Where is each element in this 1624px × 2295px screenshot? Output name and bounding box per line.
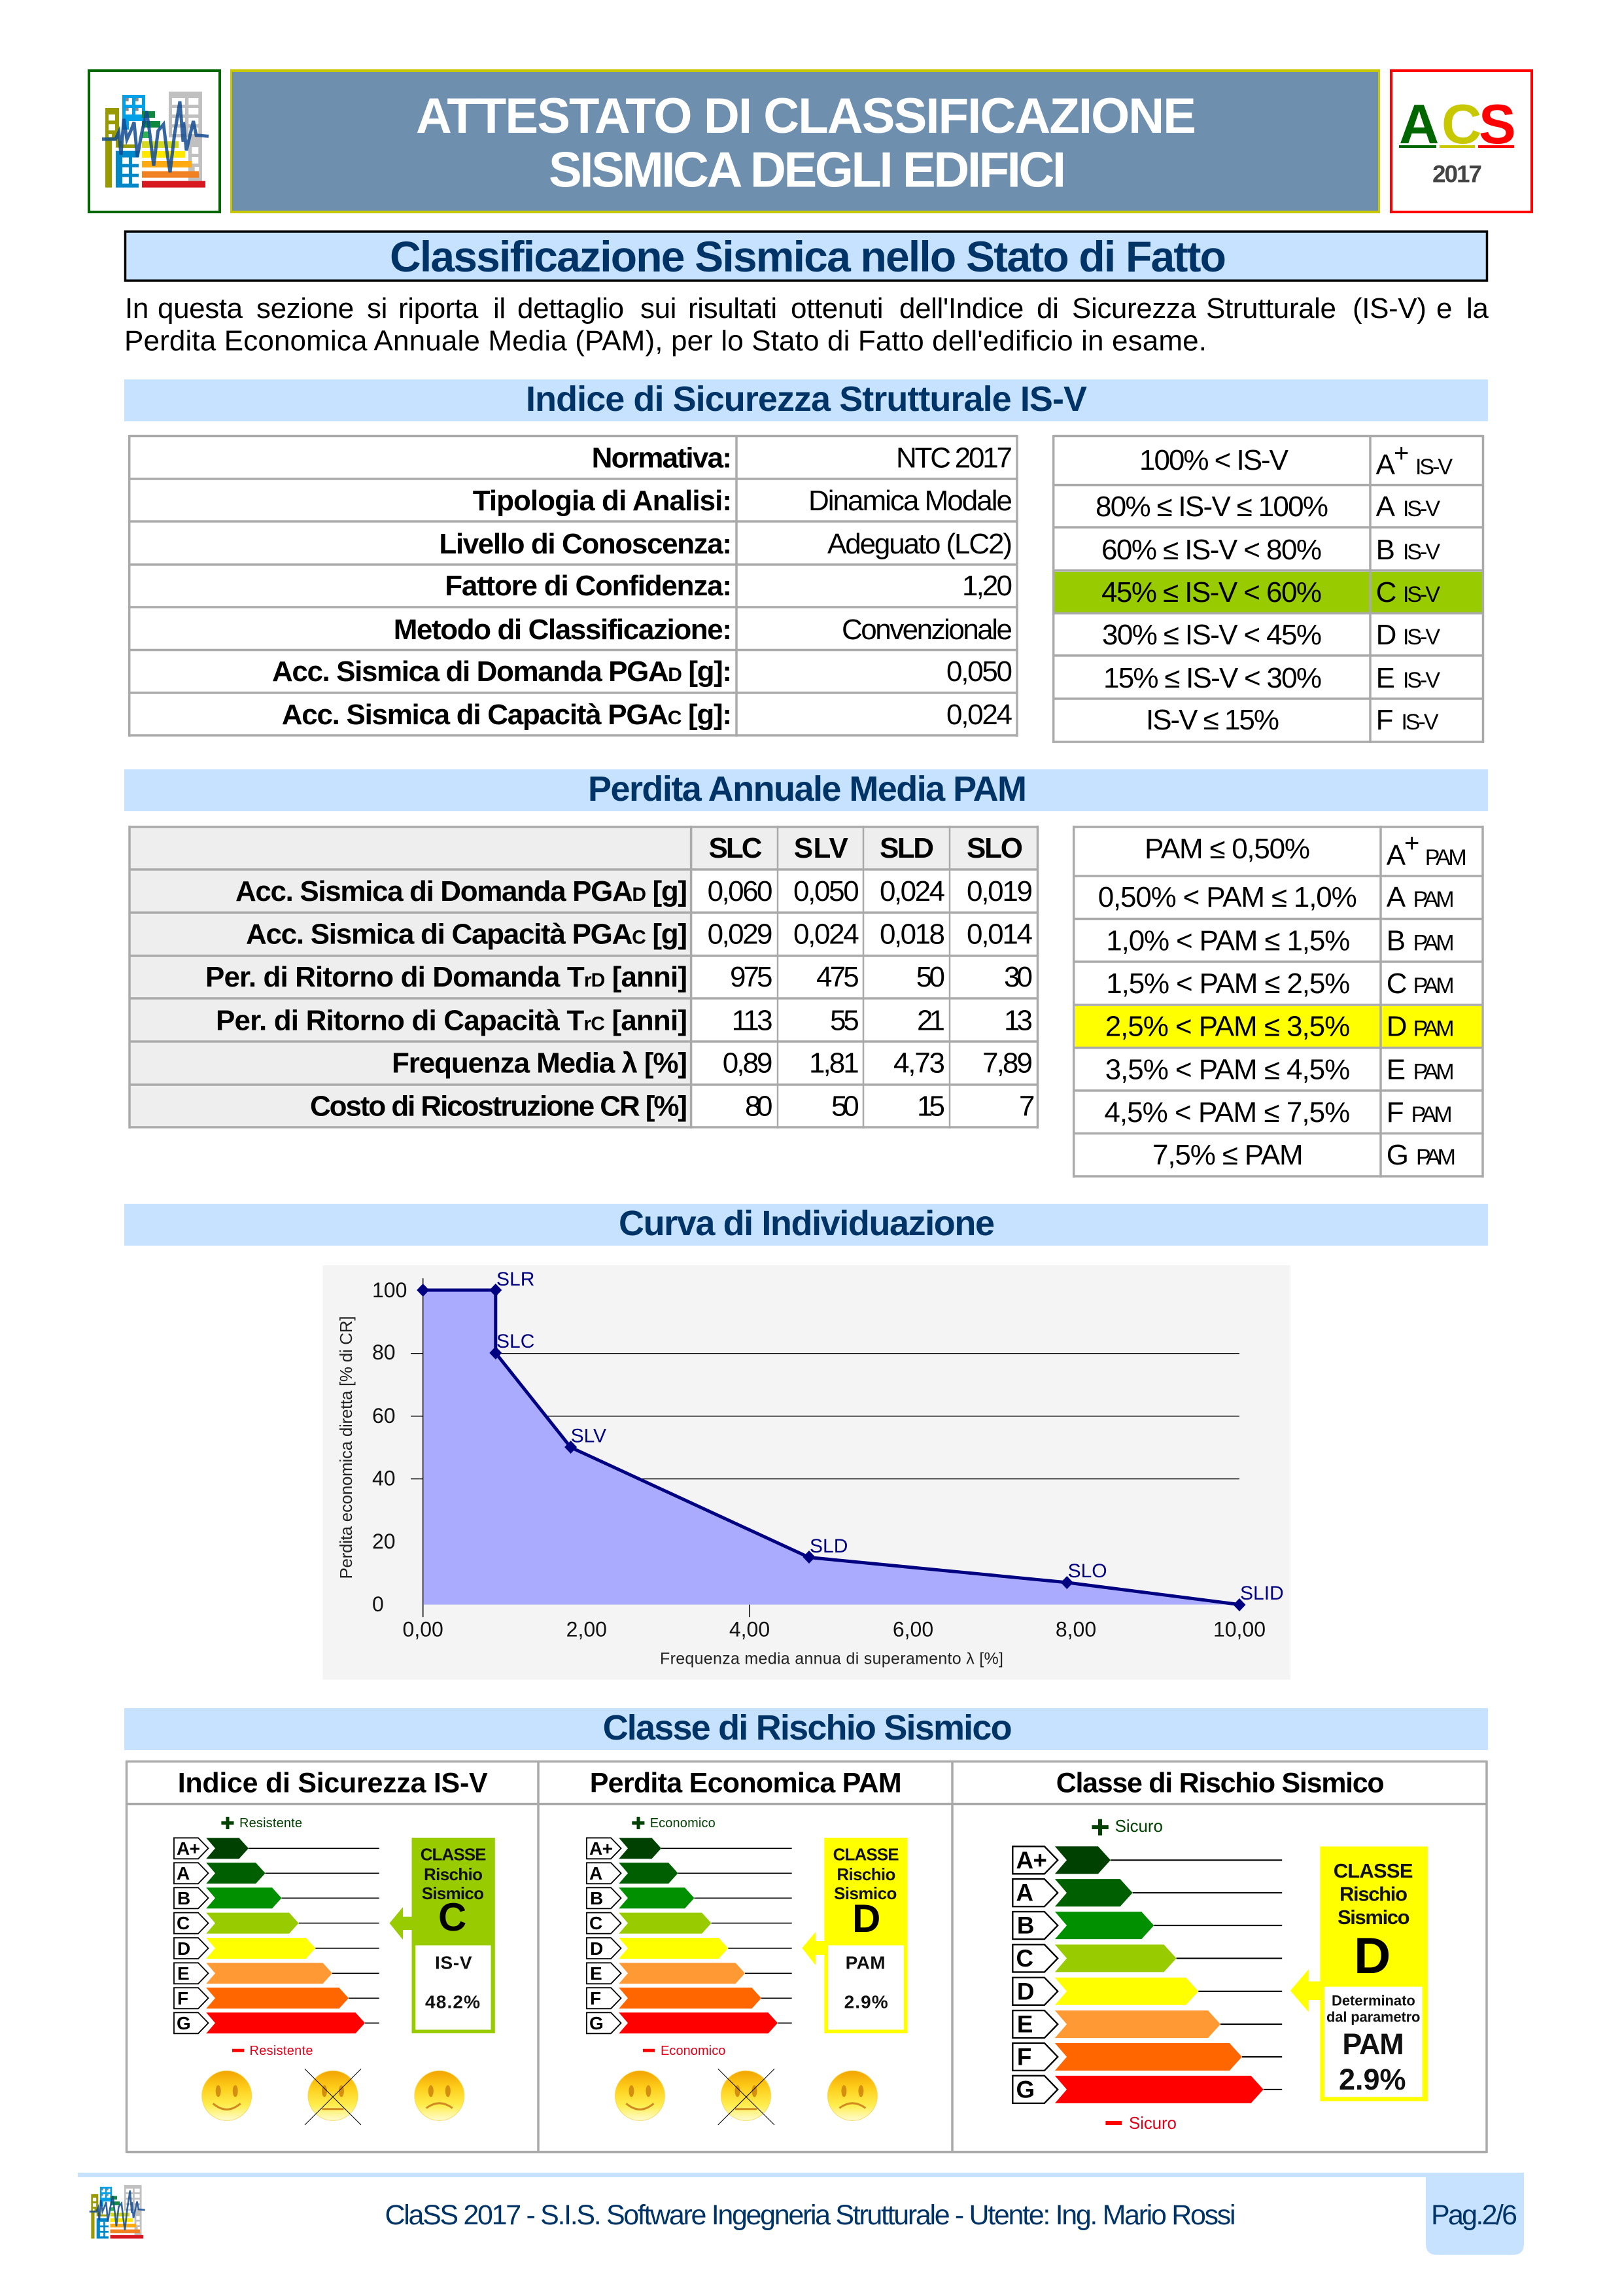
- ACS logo box: 2017: [1432, 160, 1482, 187]
- chart: curva di individuazione: 20: [372, 1530, 396, 1553]
- callout: class C IS-V: Rischio: [424, 1865, 483, 1884]
- panel: PAM energy scale: D: [590, 1938, 603, 1959]
- table: PAM classes: PAM: [1413, 1060, 1455, 1085]
- intro paragraph: la: [1466, 292, 1489, 324]
- title banner: [230, 69, 1380, 213]
- table: PAM classes: G: [1387, 1139, 1409, 1171]
- table: PAM parameters by limit state: Acc. Sismica di Capacità PGAC [g]: [246, 919, 687, 950]
- table: PAM parameters by limit state: Per. di Ritorno di Capacità TrC [anni]: [216, 1005, 687, 1036]
- table: analysis parameters: 0,024: [946, 699, 1012, 731]
- footer strip: Pag.2/6: [1431, 2199, 1517, 2231]
- title banner: SISMICA DEGLI EDIFICI: [549, 143, 1066, 198]
- intro paragraph: risultati: [688, 292, 777, 324]
- callout: class C IS-V: 48.2%: [425, 1991, 480, 2012]
- banner: Classe di Rischio Sismico: [124, 1708, 1488, 1750]
- panel: IS-V energy scale: E: [177, 1963, 190, 1984]
- table: analysis parameters: 1,20: [962, 570, 1012, 602]
- callout: overall class D: [1290, 1846, 1428, 2101]
- section heading: [126, 232, 1487, 281]
- table frame: risk class: Indice di Sicurezza IS-V: [178, 1768, 488, 1799]
- table: PAM parameters by limit state: 0,014: [967, 919, 1033, 950]
- callout: overall class D: CLASSE: [1334, 1859, 1413, 1882]
- intro paragraph: Perdita Economica Annuale Media (PAM), per lo Stato di Fatto dell'edificio in esame.: [124, 324, 1207, 357]
- table: PAM classes: PAM: [1413, 931, 1455, 956]
- intro paragraph: dell'Indice: [899, 292, 1024, 324]
- table: PAM parameters by limit state: 0,024: [793, 919, 859, 950]
- callout: class D PAM: D: [852, 1897, 880, 1940]
- ACS logo box: A: [1399, 94, 1439, 156]
- table: analysis parameters: 0,050: [946, 656, 1012, 688]
- table: PAM classes: [1074, 826, 1483, 1178]
- chart: curva di individuazione: Frequenza media annua di superamento λ [%]: [660, 1650, 1003, 1668]
- chart: curva di individuazione: 80: [372, 1340, 396, 1364]
- table: PAM classes: 1,0% < PAM ≤ 1,5%: [1106, 925, 1350, 957]
- panel: overall risk energy scale: D: [1017, 1978, 1034, 2005]
- panel: PAM energy scale: Economico: [650, 1816, 716, 1831]
- table: PAM classes: PAM: [1416, 1145, 1456, 1170]
- table: PAM classes: E: [1387, 1054, 1406, 1086]
- callout: class D PAM: Sismico: [834, 1883, 897, 1903]
- chart: curva di individuazione: 4,00: [729, 1618, 770, 1641]
- panel: PAM energy scale: G: [589, 2013, 604, 2033]
- panel: IS-V energy scale: Resistente: [239, 1816, 302, 1831]
- table: IS-V classes: 80% ≤ IS-V ≤ 100%: [1096, 491, 1328, 523]
- table: PAM classes: 1,5% < PAM ≤ 2,5%: [1106, 968, 1350, 1000]
- intro paragraph: di: [1037, 292, 1058, 324]
- callout: overall class D: Rischio: [1339, 1882, 1408, 1905]
- panel: PAM energy scale: [587, 1816, 792, 2058]
- banner: Perdita Annuale Media PAM: Perdita Annuale Media PAM: [588, 769, 1027, 809]
- table frame: risk class: Classe di Rischio Sismico: [1056, 1768, 1385, 1799]
- panel: overall risk energy scale: Sicuro: [1129, 2113, 1177, 2133]
- chart: curva di individuazione: 8,00: [1056, 1618, 1096, 1641]
- footer strip: [78, 2173, 1524, 2255]
- chart: curva di individuazione: 0: [372, 1592, 384, 1616]
- table: IS-V classes: IS-V: [1403, 497, 1440, 521]
- title banner: ATTESTATO DI CLASSIFICAZIONE: [416, 88, 1196, 144]
- chart: curva di individuazione: SLO: [1068, 1560, 1107, 1582]
- table: PAM classes: A: [1387, 839, 1406, 871]
- table: PAM parameters by limit state: 0,024: [880, 875, 945, 907]
- table: IS-V classes: IS-V: [1401, 710, 1439, 735]
- chart: curva di individuazione: 2,00: [566, 1618, 607, 1641]
- chart: curva di individuazione: 6,00: [893, 1618, 933, 1641]
- table: analysis parameters: Acc. Sismica di Domanda PGAD [g]:: [272, 656, 732, 688]
- panel: overall risk energy scale: F: [1017, 2043, 1031, 2070]
- banner: Indice di Sicurezza Strutturale: [124, 379, 1488, 421]
- smileys: PAM: [615, 2069, 877, 2125]
- callout: class D PAM: Rischio: [837, 1865, 895, 1884]
- table: IS-V classes: C: [1376, 576, 1396, 608]
- table: PAM classes: 4,5% < PAM ≤ 7,5%: [1104, 1096, 1350, 1129]
- chart: curva di individuazione: SLD: [810, 1535, 848, 1557]
- table: PAM parameters by limit state: 1,81: [809, 1047, 859, 1079]
- smileys: IS-V: [202, 2069, 464, 2125]
- table: PAM classes: PAM: [1413, 887, 1455, 912]
- chart: curva di individuazione: [323, 1265, 1290, 1680]
- logo box: buildings icon: [89, 71, 220, 212]
- table: IS-V classes: E: [1376, 662, 1395, 694]
- table: analysis parameters: [130, 435, 1017, 737]
- table: PAM parameters by limit state: 0,060: [708, 875, 773, 907]
- table: PAM parameters by limit state: 0,018: [880, 919, 945, 950]
- table: IS-V classes: IS-V: [1403, 668, 1440, 693]
- intro paragraph: riporta: [398, 292, 479, 324]
- panel: overall risk energy scale: C: [1016, 1945, 1033, 1972]
- table: PAM classes: PAM: [1411, 1102, 1453, 1127]
- intro paragraph: ottenuti: [791, 292, 883, 324]
- chart: curva di individuazione: 10,00: [1213, 1618, 1266, 1641]
- panel: overall risk energy scale: A+: [1016, 1847, 1047, 1874]
- intro paragraph: sui: [640, 292, 676, 324]
- table: PAM parameters by limit state: 15: [917, 1090, 945, 1122]
- panel: PAM energy scale: B: [590, 1888, 603, 1908]
- intro paragraph: si: [367, 292, 387, 324]
- table: PAM parameters by limit state: Per. di Ritorno di Domanda TrD [anni]: [205, 961, 687, 993]
- ACS logo box: [1391, 71, 1532, 212]
- table: PAM parameters by limit state: Frequenza Media λ [%]: [392, 1047, 687, 1079]
- callout: class C IS-V: Sismico: [422, 1883, 484, 1903]
- intro paragraph: sezione: [256, 292, 354, 324]
- callout: class D PAM: CLASSE: [833, 1845, 899, 1865]
- table: PAM classes: PAM: [1425, 845, 1467, 870]
- panel: PAM energy scale: A+: [589, 1838, 613, 1859]
- table: analysis parameters: Fattore di Confidenza:: [445, 570, 732, 602]
- callout: class C IS-V: IS-V: [435, 1952, 472, 1972]
- table: PAM classes: B: [1387, 925, 1406, 957]
- chart: curva di individuazione: SLID: [1240, 1583, 1284, 1604]
- callout: overall class D: PAM: [1342, 2027, 1404, 2061]
- panel: IS-V energy scale: A: [177, 1863, 190, 1883]
- table: PAM parameters by limit state: [130, 826, 1037, 1129]
- area under curve: [423, 1290, 1239, 1605]
- callout: overall class D: 2.9%: [1339, 2063, 1406, 2096]
- table: PAM classes: 0,50% < PAM ≤ 1,0%: [1098, 881, 1357, 913]
- table: IS-V classes: 45% ≤ IS-V < 60%: [1101, 576, 1322, 608]
- table: PAM parameters by limit state: 475: [816, 961, 859, 993]
- panel: PAM energy scale: C: [589, 1913, 602, 1933]
- ACS logo box: S: [1479, 94, 1516, 156]
- intro paragraph: (IS-V): [1353, 292, 1426, 324]
- table: PAM classes: A: [1387, 881, 1406, 913]
- table: PAM classes: D: [1387, 1010, 1408, 1043]
- chart: curva di individuazione: Perdita economica diretta [% di CR]: [336, 1316, 356, 1579]
- intro paragraph: questa: [158, 292, 243, 324]
- table: IS-V classes: 60% ≤ IS-V < 80%: [1101, 534, 1322, 566]
- chart: curva di individuazione: 60: [372, 1404, 396, 1428]
- banner: Curva di Individuazione: [124, 1204, 1488, 1246]
- table: IS-V classes: IS-V: [1403, 540, 1440, 565]
- panel: PAM energy scale: F: [590, 1988, 601, 2008]
- chart: curva di individuazione: SLV: [571, 1425, 606, 1447]
- intro paragraph: In: [125, 292, 148, 324]
- callout: class C IS-V: C: [438, 1895, 466, 1939]
- table: analysis parameters: NTC 2017: [896, 442, 1012, 474]
- callout: overall class D: Determinato: [1332, 1992, 1415, 2008]
- table: PAM parameters by limit state: 13: [1004, 1005, 1033, 1036]
- table: PAM parameters by limit state: 7: [1019, 1090, 1035, 1122]
- table: analysis parameters: Livello di Conoscenza:: [439, 528, 732, 560]
- panel: PAM energy scale: E: [590, 1963, 602, 1984]
- table: PAM classes: +: [1404, 829, 1419, 858]
- panel: overall risk energy scale: A: [1016, 1880, 1033, 1906]
- table: PAM parameters by limit state: Costo di Ricostruzione CR [%]: [310, 1090, 687, 1122]
- panel: overall risk energy scale: Sicuro: [1115, 1816, 1163, 1836]
- table: IS-V classes: IS-V ≤ 15%: [1146, 704, 1279, 736]
- table: IS-V classes: D: [1376, 619, 1396, 651]
- panel: PAM energy scale: A: [589, 1863, 602, 1883]
- panel: IS-V energy scale: A+: [177, 1838, 200, 1859]
- chart: curva di individuazione: 0,00: [403, 1618, 443, 1641]
- table: PAM classes: C: [1387, 968, 1408, 1000]
- table: PAM parameters by limit state: 0,019: [967, 875, 1033, 907]
- panel: overall risk energy scale: E: [1017, 2011, 1033, 2038]
- table: PAM parameters by limit state: 30: [1004, 961, 1033, 993]
- table: PAM parameters by limit state: SLD: [880, 832, 934, 864]
- table: PAM parameters by limit state: SLC: [709, 832, 763, 864]
- table: PAM classes: PAM: [1413, 1017, 1455, 1042]
- table: analysis parameters: Tipologia di Analisi:: [473, 485, 732, 517]
- callout: overall class D: dal parametro: [1326, 2009, 1421, 2025]
- intro paragraph: Sicurezza: [1072, 292, 1197, 324]
- table: IS-V classes: A: [1376, 491, 1396, 523]
- table: PAM parameters by limit state: 21: [917, 1005, 945, 1036]
- table: IS-V classes: +: [1394, 439, 1409, 468]
- panel: IS-V energy scale: D: [177, 1938, 190, 1959]
- table: analysis parameters: Normativa:: [592, 442, 732, 474]
- table frame: risk class: [127, 1761, 1487, 2153]
- callout: class C IS-V: CLASSE: [421, 1845, 487, 1865]
- table: IS-V classes: IS-V: [1403, 625, 1440, 650]
- table: PAM parameters by limit state: 50: [916, 961, 945, 993]
- section heading: Classificazione Sismica nello Stato di Fatto: [390, 232, 1226, 281]
- table: PAM parameters by limit state: 113: [732, 1005, 773, 1036]
- table: IS-V classes: 100% < IS-V: [1139, 444, 1289, 476]
- table: analysis parameters: Acc. Sismica di Capacità PGAC [g]:: [282, 699, 732, 731]
- table: PAM parameters by limit state: 55: [830, 1005, 859, 1036]
- footer strip: ClaSS 2017 - S.I.S. Software Ingegneria Strutturale - Utente: Ing. Mario Rossi: [385, 2199, 1236, 2231]
- table: analysis parameters: Metodo di Classificazione:: [394, 614, 732, 646]
- table: IS-V classes: A: [1376, 449, 1396, 481]
- table frame: risk class: Perdita Economica PAM: [590, 1768, 902, 1799]
- chart: curva di individuazione: 40: [372, 1466, 396, 1490]
- panel: IS-V energy scale: G: [177, 2013, 191, 2033]
- intro paragraph: il: [493, 292, 506, 324]
- intro paragraph: Strutturale: [1206, 292, 1336, 324]
- callout: overall class D: Sismico: [1338, 1906, 1410, 1929]
- table: PAM parameters by limit state: 975: [730, 961, 773, 993]
- table: analysis parameters: Adeguato (LC2): [827, 528, 1012, 560]
- banner: Indice di Sicurezza Strutturale: Indice di Sicurezza Strutturale IS-V: [526, 379, 1087, 419]
- chart: curva di individuazione: SLC: [496, 1331, 534, 1352]
- ACS logo box: C: [1442, 94, 1481, 156]
- callout: class C IS-V: [390, 1838, 495, 2033]
- banner: Curva di Individuazione: Curva di Individuazione: [619, 1204, 995, 1243]
- callout: overall class D: D: [1354, 1927, 1391, 1984]
- chart: curva di individuazione: SLR: [496, 1269, 534, 1290]
- banner: Perdita Annuale Media PAM: [124, 769, 1488, 811]
- table: IS-V classes: IS-V: [1403, 582, 1440, 607]
- banner: Classe di Rischio Sismico: Classe di Rischio Sismico: [603, 1708, 1012, 1747]
- chart: curva di individuazione: 100: [372, 1278, 407, 1302]
- table: PAM parameters by limit state: 0,050: [793, 875, 859, 907]
- table: PAM classes: 2,5% < PAM ≤ 3,5%: [1105, 1010, 1350, 1043]
- callout: class D PAM: 2.9%: [844, 1991, 888, 2012]
- table: PAM parameters by limit state: 7,89: [982, 1047, 1033, 1079]
- table: IS-V classes: [1054, 435, 1483, 743]
- intro paragraph: dettaglio: [517, 292, 624, 324]
- table: analysis parameters: Dinamica Modale: [808, 485, 1012, 517]
- table: analysis parameters: Convenzionale: [842, 614, 1012, 646]
- panel: IS-V energy scale: F: [177, 1988, 188, 2008]
- table: PAM classes: PAM: [1413, 973, 1455, 998]
- table: PAM classes: 3,5% < PAM ≤ 4,5%: [1105, 1054, 1350, 1086]
- table: PAM classes: PAM ≤ 0,50%: [1145, 833, 1310, 865]
- panel: IS-V energy scale: B: [177, 1888, 190, 1908]
- table: PAM classes: 7,5% ≤ PAM: [1152, 1139, 1304, 1171]
- intro paragraph: [124, 292, 1489, 357]
- callout: class D PAM: [802, 1838, 908, 2033]
- table: IS-V classes: IS-V: [1415, 455, 1453, 480]
- panel: IS-V energy scale: Resistente: [250, 2044, 313, 2058]
- table: IS-V classes: F: [1376, 704, 1393, 736]
- table: IS-V classes: 15% ≤ IS-V < 30%: [1103, 662, 1322, 694]
- table: PAM parameters by limit state: 0,89: [723, 1047, 773, 1079]
- table: PAM parameters by limit state: 50: [831, 1090, 859, 1122]
- panel: overall risk energy scale: B: [1017, 1912, 1034, 1939]
- table: IS-V classes: 30% ≤ IS-V < 45%: [1102, 619, 1322, 651]
- table: PAM parameters by limit state: SLV: [794, 832, 848, 864]
- table: PAM parameters by limit state: 4,73: [893, 1047, 945, 1079]
- intro paragraph: e: [1436, 292, 1452, 324]
- panel: IS-V energy scale: [174, 1816, 379, 2058]
- table: PAM parameters by limit state: Acc. Sismica di Domanda PGAD [g]: [235, 875, 687, 907]
- table: PAM classes: F: [1387, 1096, 1404, 1129]
- table: IS-V classes: B: [1376, 534, 1395, 566]
- table: PAM parameters by limit state: 80: [745, 1090, 773, 1122]
- table: PAM parameters by limit state: 0,029: [708, 919, 773, 950]
- panel: PAM energy scale: Economico: [661, 2044, 725, 2058]
- panel: overall risk energy scale: G: [1016, 2076, 1035, 2103]
- callout: class D PAM: PAM: [846, 1952, 886, 1972]
- panel: IS-V energy scale: C: [177, 1913, 190, 1933]
- panel: overall risk energy scale: [1012, 1816, 1282, 2133]
- table: PAM parameters by limit state: SLO: [967, 832, 1023, 864]
